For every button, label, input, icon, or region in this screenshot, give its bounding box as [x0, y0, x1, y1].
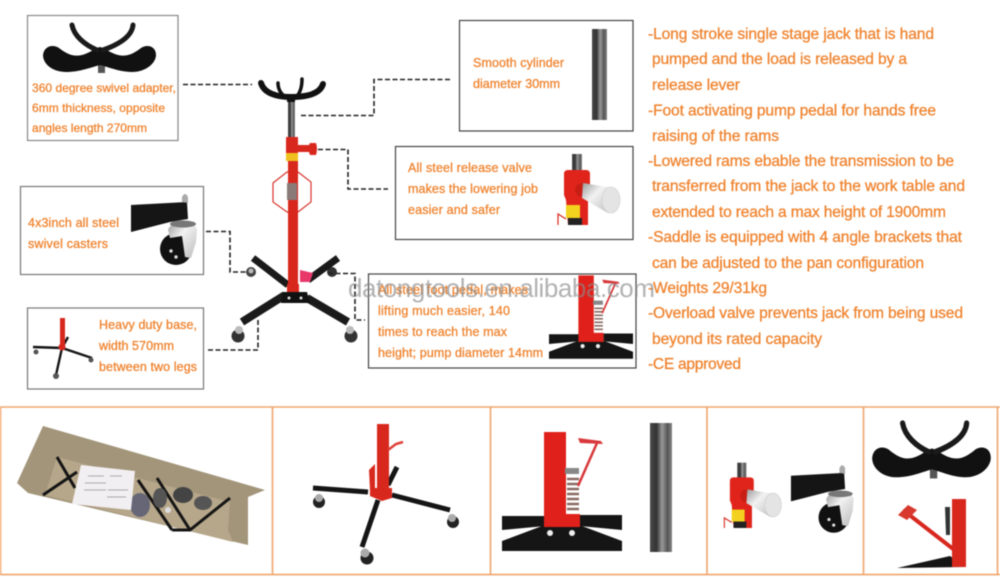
photo strip frame: [0, 407, 1000, 575]
cylinder text: Smooth cylinder: [473, 56, 564, 70]
feature list: -Lowered rams ebable the transmission to be: [648, 153, 954, 170]
jack pump pedal: [300, 270, 313, 282]
photo: valve close-up: [724, 463, 781, 528]
casters text: [28, 216, 119, 251]
foot pedal text: [378, 283, 543, 360]
release valve text: makes the lowering job: [408, 182, 538, 196]
release valve text: easier and safer: [408, 203, 500, 217]
photo: cardboard box: [17, 426, 265, 545]
watermark: datongtools.en.alibaba.com: [348, 273, 655, 303]
icon: valve: [558, 154, 620, 225]
casters text: 4x3inch all steel: [28, 216, 119, 230]
photo: three-leg base: [313, 424, 459, 564]
photo: foot pedal close-up: [502, 432, 622, 551]
feature list: -Foot activating pump pedal for hands free: [648, 102, 936, 120]
panel: smooth cylinder: [460, 20, 633, 131]
panel: release valve: [396, 146, 633, 240]
cylinder text: diameter 30mm: [473, 77, 560, 91]
release valve text: [408, 161, 538, 217]
photo: caster close-up: [791, 465, 854, 533]
icon: small base: [33, 318, 94, 379]
feature list: -Saddle is equipped with 4 angle brackets that: [648, 229, 963, 246]
main jack product: [232, 79, 358, 342]
feature list: [648, 26, 965, 373]
jack handle: [273, 172, 311, 212]
jack red column: [286, 137, 299, 292]
feature list: -Long stroke single stage jack that is hand: [648, 26, 934, 43]
photo: saddle close-up: [872, 423, 991, 478]
feature list: -Weights 29/31kg: [648, 280, 767, 297]
release valve text: All steel release valve: [408, 161, 532, 175]
icon: pedal: [549, 275, 633, 359]
photo: pedal side view: [897, 499, 966, 568]
icon: caster: [131, 194, 197, 265]
foot pedal text: height; pump diameter 14mm: [378, 346, 543, 360]
panel: swivel adapter: [28, 16, 178, 140]
base text: between two legs: [99, 360, 197, 374]
panel: casters: [20, 186, 204, 274]
swivel adapter text: [32, 81, 176, 135]
base text: [98, 318, 197, 374]
base text: Heavy duty base,: [99, 318, 197, 332]
jack release valve: [298, 143, 317, 155]
jack ram rod: [288, 100, 295, 138]
feature list: extended to reach a max height of 1900mm: [652, 204, 946, 221]
feature list: transferred from the jack to the work table and: [652, 178, 965, 195]
casters text: swivel casters: [28, 237, 108, 251]
feature list: pumped and the load is released by a: [652, 51, 907, 68]
feature list: raising of the rams: [652, 128, 779, 145]
feature list: beyond its rated capacity: [652, 331, 822, 348]
jack saddle: [261, 79, 323, 102]
cylinder text: [473, 56, 564, 91]
instruction sheet: [72, 465, 135, 510]
feature list: -Overload valve prevents jack from being used: [648, 305, 963, 322]
dashed connector lines: [183, 80, 450, 350]
photo: cylinder: [650, 423, 672, 552]
panel: heavy duty base: [28, 308, 204, 389]
swivel adapter text: angles length 270mm: [32, 121, 147, 135]
swivel adapter text: 6mm thickness, opposite: [32, 101, 165, 115]
feature list: release lever: [652, 77, 740, 94]
swivel adapter text: 360 degree swivel adapter,: [32, 81, 176, 95]
icon: saddle: [43, 25, 156, 73]
feature list: can be adjusted to the pan configuration: [652, 255, 924, 272]
base text: width 570mm: [98, 339, 174, 353]
foot pedal text: All steel foot pedal, makes: [378, 283, 528, 297]
jack base legs: [232, 258, 358, 342]
panel: foot pedal: [368, 274, 636, 368]
icon: cylinder: [592, 29, 607, 120]
foot pedal text: times to reach the max: [378, 325, 508, 339]
feature list: -CE approved: [648, 356, 741, 373]
foot pedal text: lifting much easier, 140: [378, 304, 510, 318]
